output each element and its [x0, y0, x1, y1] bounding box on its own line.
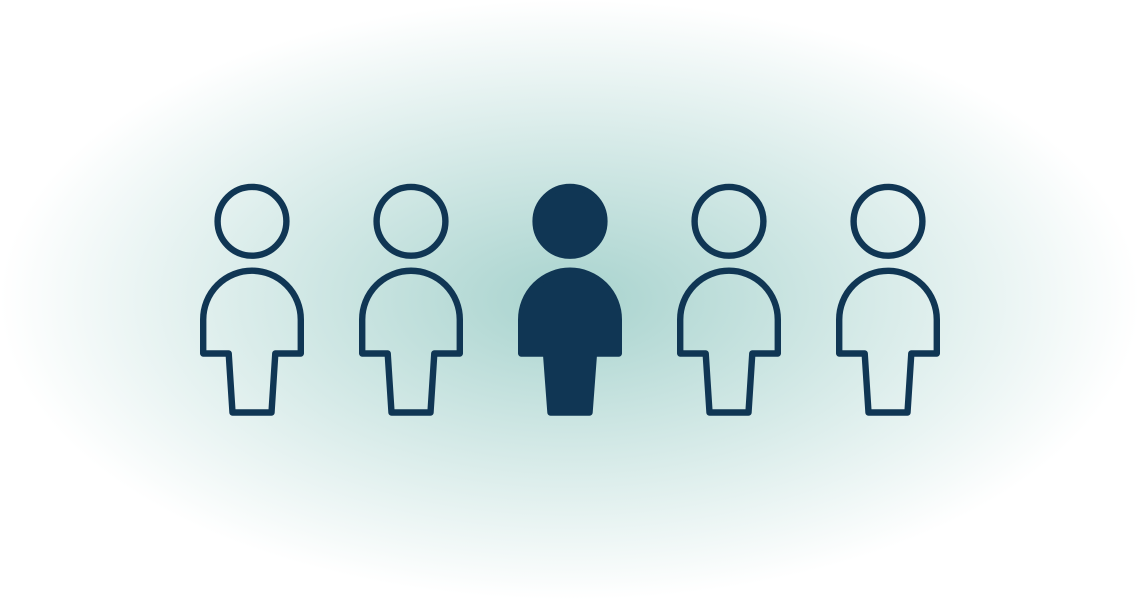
icon: person 5 outline [839, 187, 937, 412]
icon: person 2 outline [362, 187, 460, 412]
icon: person 4 outline [680, 187, 778, 412]
icon: person 1 outline [203, 187, 301, 412]
icon: person 3 highlighted solid [521, 187, 619, 412]
